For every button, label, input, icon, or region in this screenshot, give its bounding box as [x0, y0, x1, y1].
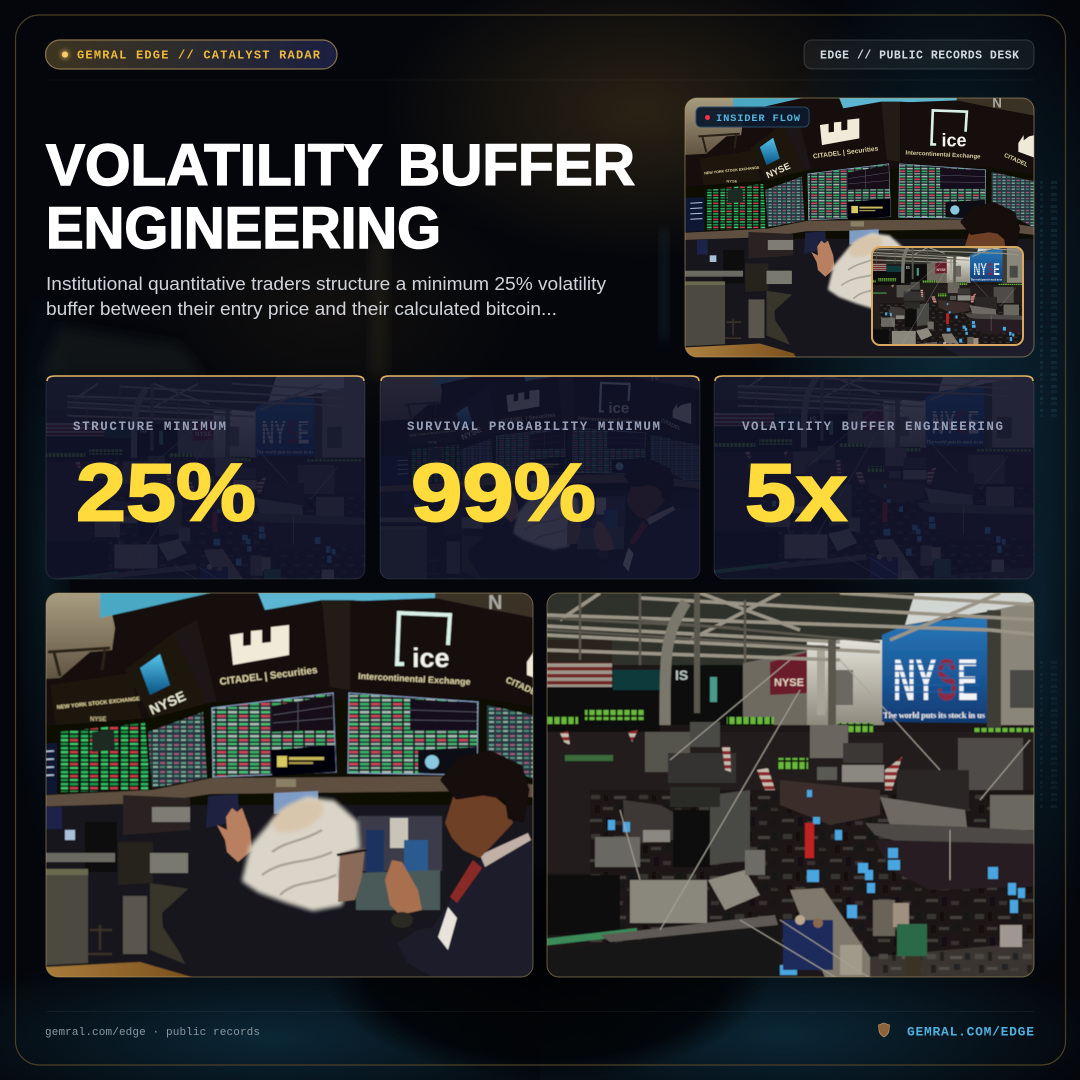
photo: traders at exchange screens — [46, 592, 534, 978]
stat card: survival probability minimum: 99% — [411, 448, 596, 538]
badge: Gemral Edge catalyst radar — [46, 40, 337, 69]
footer left text: gemral.com/edge · public records — [45, 1027, 260, 1039]
badge: public records desk — [804, 40, 1034, 69]
footer right link: GEMRAL.COM/EDGE — [907, 1024, 1034, 1040]
stat card: survival probability minimum: SURVIVAL PROBABILITY MINIMUM — [407, 420, 660, 434]
badge: public records desk: EDGE // PUBLIC RECORDS DESK — [820, 50, 1019, 62]
badge: Gemral Edge catalyst radar: GEMRAL EDGE // CATALYST RADAR — [77, 48, 321, 62]
inset photo: trading floor — [871, 246, 1024, 346]
icon: shield — [878, 1023, 890, 1037]
stat card: volatility buffer engineering — [714, 375, 1034, 580]
stat card: structure minimum: 25% — [76, 448, 256, 538]
stat card: structure minimum: STRUCTURE MINIMUM — [73, 420, 226, 434]
tag: insider flow — [696, 107, 809, 127]
hero photo with inset — [684, 98, 1034, 358]
stat card: volatility buffer engineering: 5x — [745, 448, 847, 538]
title: VOLATILITY BUFFER — [46, 133, 635, 198]
tag: insider flow: INSIDER FLOW — [716, 113, 801, 125]
stat card: survival probability minimum — [380, 375, 700, 580]
subtitle text: Institutional quantitative traders structure a minimum 25% volatility — [46, 273, 607, 294]
title — [46, 133, 635, 261]
photo: NYSE trading floor — [546, 592, 1034, 978]
stat card: volatility buffer engineering: VOLATILITY BUFFER ENGINEERING — [742, 420, 1003, 434]
subtitle text — [46, 273, 607, 319]
stat card: structure minimum — [46, 375, 366, 580]
title: ENGINEERING — [46, 196, 441, 261]
subtitle text: buffer between their entry price and their calculated bitcoin... — [46, 298, 557, 319]
